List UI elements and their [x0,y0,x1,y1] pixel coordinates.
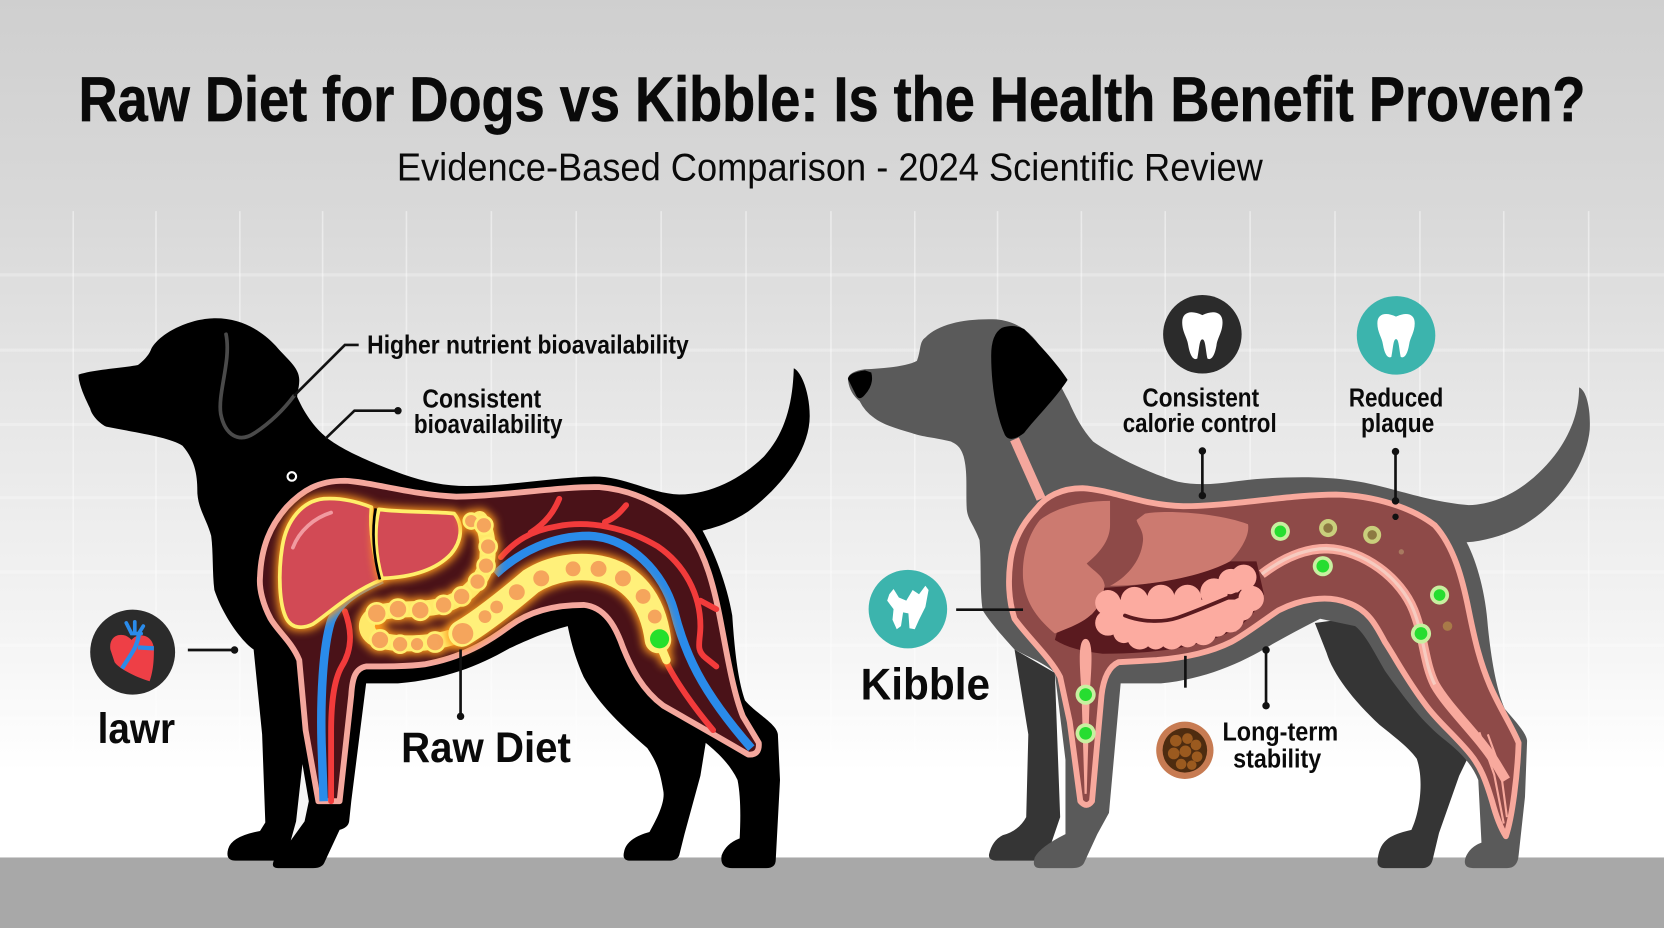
icon: heart [90,610,175,695]
body cavity [1009,488,1519,836]
leader line [326,411,398,438]
leader dot [231,646,238,654]
label line 2: calorie control [1123,410,1277,438]
small intestine [367,514,497,653]
panel: raw diet dog [79,318,810,868]
rear hind leg [1315,616,1475,868]
leader line [956,608,1023,611]
label: lawr [98,705,175,752]
leader line [1265,649,1267,706]
nutrient markers [1076,519,1452,743]
shoulder marker [288,472,296,481]
digestive tract highlight [1262,549,1435,684]
label: Consistent [1142,384,1260,412]
callout: raw diet [401,649,571,771]
hind leg tendons [1479,732,1507,824]
body cavity [260,481,759,801]
black dog silhouette [79,318,810,868]
liver lobe left [280,499,382,627]
leader line [459,649,462,716]
leader dots [1199,447,1206,499]
callout: consistent calorie control [1123,295,1277,499]
intestine fold [1125,594,1236,621]
leader dot [457,713,464,720]
callout: long-term stability [1156,646,1338,779]
grey dog silhouette [848,319,1590,868]
icon: molar teal [869,570,947,648]
short tick line [1184,656,1187,688]
icon: tooth teal [1357,296,1435,375]
ear [991,326,1068,439]
liver divider [373,508,380,579]
leader line [1201,451,1204,496]
rear front leg [989,649,1060,861]
label: Reduced [1349,384,1443,412]
leader dot [394,407,402,414]
foreleg tube [1081,640,1090,794]
dark abdominal cavity [1055,561,1264,654]
ground [0,857,1664,928]
leader line [188,649,235,651]
callout: higher nutrient bioavailability [294,329,689,396]
esophagus [1015,439,1041,499]
stomach lobe right [1110,512,1248,586]
intestines [1095,565,1264,649]
liver highlight [293,513,331,548]
callout: reduced plaque [1349,296,1443,520]
liver lobe right [376,509,460,578]
label line 2: bioavailability [414,411,563,439]
digestive tract [1262,549,1506,780]
leader line [1394,451,1397,501]
callout: kibble [861,570,1023,709]
panel: kibble dog [848,319,1590,868]
leader dots [1392,448,1399,520]
subtitle: Evidence-Based Comparison - 2024 Scientific Review [397,146,1264,189]
green marker [650,629,669,648]
icon: kibble bowl [1156,722,1214,779]
large intestine [452,561,666,660]
nose [848,370,872,398]
stomach lobe left [1023,501,1110,634]
label: Consistent [422,386,542,414]
callout: heart icon [90,610,238,752]
leader dots [1262,646,1270,709]
label: Kibble [861,660,990,709]
leader line [294,345,359,396]
label line 2: stability [1233,745,1322,773]
label: Raw Diet [401,724,571,771]
ear outline [220,334,294,438]
label: Higher nutrient bioavailability [367,329,689,359]
callout: consistent bioavailability [326,386,563,439]
gap between front legs [291,764,309,840]
label line 2: plaque [1361,410,1434,438]
red arteries [331,499,716,801]
blue veins [321,536,751,801]
label: Long-term [1223,719,1338,747]
icon: tooth dark [1163,295,1242,374]
